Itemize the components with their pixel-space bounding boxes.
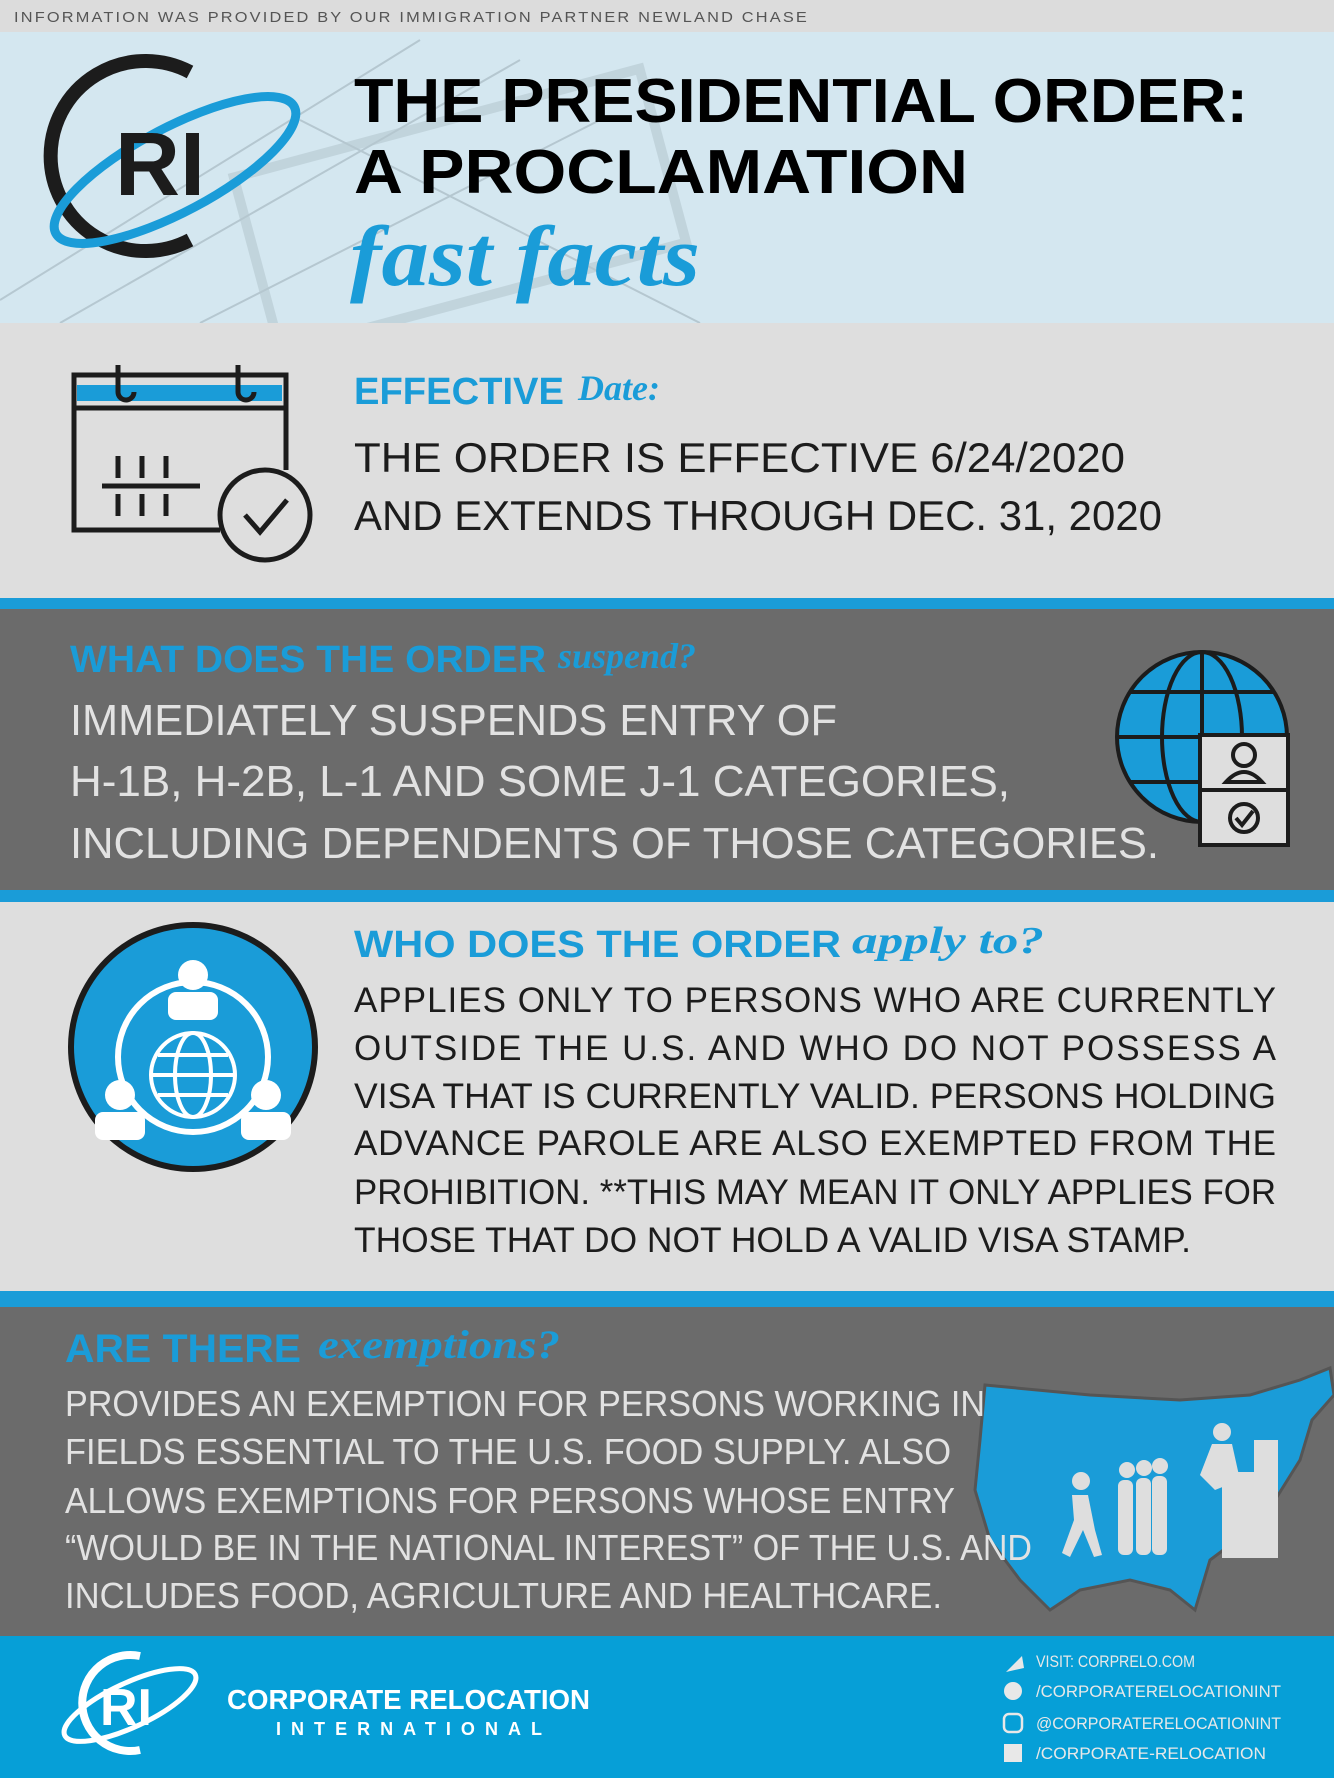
contact list: @CORPORATERELOCATIONINT	[1036, 1714, 1281, 1733]
body text: IMMEDIATELY SUSPENDS ENTRY OF	[70, 696, 837, 745]
heading: suspend?	[557, 636, 696, 676]
company name: INTERNATIONAL	[276, 1719, 542, 1739]
body text	[354, 981, 1277, 1260]
header panel	[0, 32, 1334, 351]
panel: who does it apply to	[0, 902, 1334, 1291]
body text: FIELDS ESSENTIAL TO THE U.S. FOOD SUPPLY. ALSO	[65, 1431, 951, 1472]
contact list: VISIT: CORPRELO.COM	[1036, 1652, 1195, 1671]
body text: VISA THAT IS CURRENTLY VALID. PERSONS HOLDING	[354, 1077, 1276, 1116]
company name: CORPORATE RELOCATION	[227, 1684, 590, 1715]
title: THE PRESIDENTIAL ORDER:	[354, 67, 1248, 136]
heading: WHO DOES THE ORDER	[354, 924, 841, 966]
heading: EFFECTIVE	[354, 371, 564, 413]
body text	[354, 434, 1162, 539]
contact list	[1004, 1652, 1281, 1763]
panel: suspend	[0, 609, 1334, 890]
body text: H-1B, H-2B, L-1 AND SOME J-1 CATEGORIES,	[70, 757, 1010, 806]
body text: APPLIES ONLY TO PERSONS WHO ARE CURRENTLY	[354, 981, 1276, 1020]
logo: CRI: RI	[115, 115, 205, 215]
body text: OUTSIDE THE U.S. AND WHO DO NOT POSSESS A	[354, 1029, 1277, 1068]
logo: footer CRI	[55, 1655, 205, 1755]
body text: PROHIBITION. **THIS MAY MEAN IT ONLY APPLIES FOR	[354, 1173, 1276, 1212]
top strip: INFORMATION WAS PROVIDED BY OUR IMMIGRATION PARTNER NEWLAND CHASE	[14, 9, 809, 26]
heading: exemptions?	[318, 1322, 560, 1367]
body text: INCLUDING DEPENDENTS OF THOSE CATEGORIES.	[70, 819, 1159, 868]
company name	[227, 1684, 590, 1739]
subtitle: fast facts: fast facts	[350, 208, 700, 304]
contact list: /CORPORATERELOCATIONINT	[1036, 1682, 1281, 1701]
logo: CRI	[36, 61, 314, 270]
heading	[65, 1322, 560, 1371]
heading	[354, 920, 1044, 966]
title	[354, 67, 1248, 207]
icon: people around globe	[71, 925, 315, 1169]
heading: apply to?	[852, 920, 1044, 962]
body text: AND EXTENDS THROUGH DEC. 31, 2020	[354, 492, 1162, 539]
body text: INCLUDES FOOD, AGRICULTURE AND HEALTHCARE.	[65, 1575, 942, 1616]
body text	[70, 696, 1159, 868]
logo: footer CRI: RI	[100, 1679, 152, 1737]
icon: calendar	[74, 365, 310, 560]
contact list: /CORPORATE-RELOCATION	[1036, 1744, 1266, 1763]
body text: ALLOWS EXEMPTIONS FOR PERSONS WHOSE ENTRY	[65, 1480, 955, 1521]
footer	[0, 1636, 1334, 1778]
top strip	[0, 0, 1334, 32]
title: A PROCLAMATION	[354, 138, 968, 207]
body text: THOSE THAT DO NOT HOLD A VALID VISA STAMP.	[354, 1221, 1191, 1260]
heading: Date:	[577, 368, 660, 408]
body text: PROVIDES AN EXEMPTION FOR PERSONS WORKING IN	[65, 1383, 985, 1424]
heading: ARE THERE	[65, 1327, 301, 1371]
icon: US map with people	[975, 1368, 1334, 1610]
heading	[354, 368, 660, 413]
icon: globe with passport	[1117, 652, 1288, 845]
body text	[65, 1383, 1032, 1616]
body text: “WOULD BE IN THE NATIONAL INTEREST” OF THE U.S. AND	[65, 1527, 1032, 1568]
body text: ADVANCE PAROLE ARE ALSO EXEMPTED FROM THE	[354, 1124, 1276, 1163]
panel: exemptions	[0, 1307, 1334, 1636]
heading: WHAT DOES THE ORDER	[70, 639, 546, 681]
panel: effective date	[0, 323, 1334, 598]
heading	[70, 636, 696, 681]
body text: THE ORDER IS EFFECTIVE 6/24/2020	[354, 434, 1125, 481]
